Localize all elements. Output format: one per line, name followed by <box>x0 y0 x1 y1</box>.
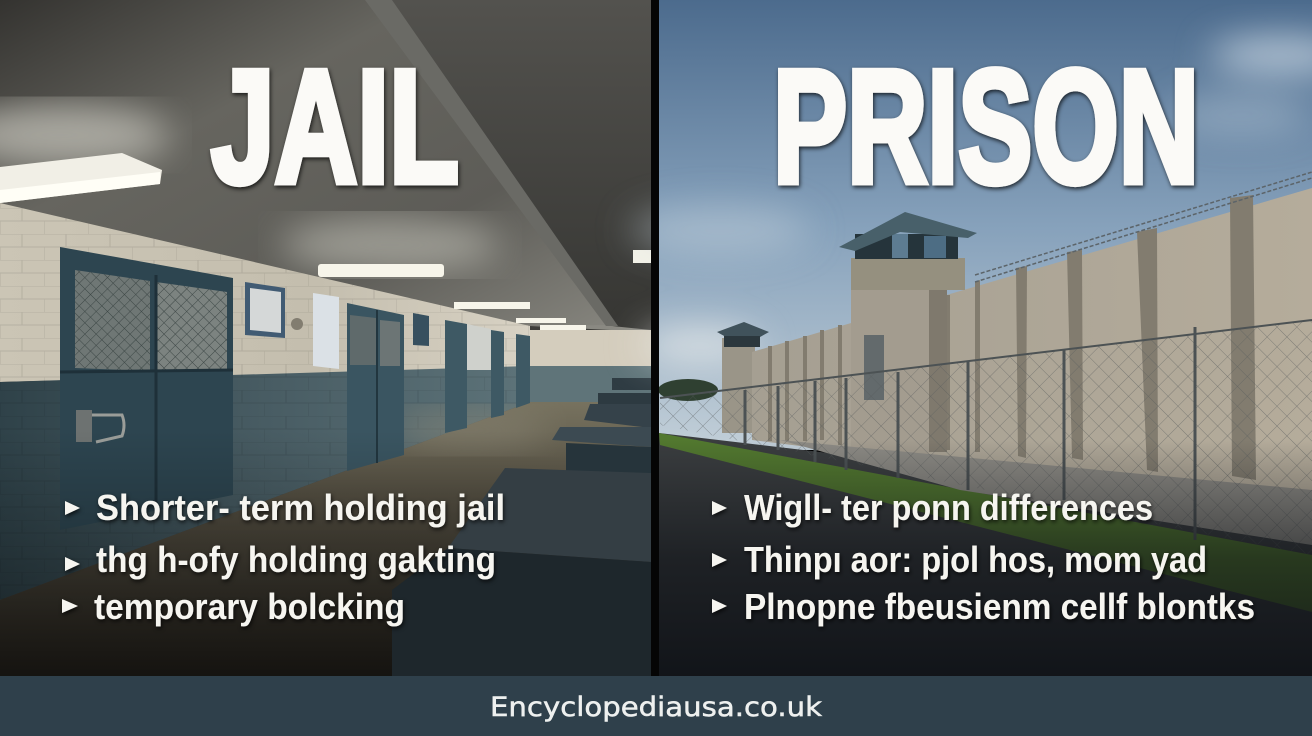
lower shading <box>659 440 1312 676</box>
jail ceiling <box>0 0 651 332</box>
perimeter wall <box>752 188 1312 510</box>
ground <box>659 433 1312 676</box>
cell door 1 <box>60 247 233 530</box>
tables <box>392 378 651 676</box>
footer bar <box>0 676 1312 736</box>
sky <box>659 0 1312 450</box>
jail upper wall <box>0 203 530 382</box>
ceiling lights <box>0 153 651 330</box>
razor wire on wall <box>975 172 1312 282</box>
distant trees <box>658 379 718 401</box>
prison bullet 1: Wigll- ter ponn differences <box>744 487 1153 528</box>
text block: prison bullets <box>712 487 1255 627</box>
panel: prison exterior photo illustration <box>630 0 1312 676</box>
panel: jail interior photo illustration <box>0 0 651 676</box>
wall notices <box>245 282 429 369</box>
title: JAIL: JAIL <box>211 37 459 217</box>
chain-link fence <box>660 320 1312 555</box>
divider <box>651 0 659 676</box>
text block: jail bullets <box>62 487 505 627</box>
main watchtower <box>839 212 977 454</box>
far cell doors <box>445 320 530 433</box>
prison bullet 3: Plnopne fbeusienm cellf blontks <box>744 586 1255 627</box>
footer website text: Encyclopediausa.co.uk <box>490 692 822 723</box>
prison bullet 2: Thinpı aor: pjol hos, mom yad <box>744 539 1207 580</box>
jail bullet 1: Shorter- term holding jail <box>96 487 505 528</box>
clouds <box>630 37 1312 363</box>
jail end wall <box>530 330 651 402</box>
cell door 2 <box>347 303 404 471</box>
lower shading <box>0 430 651 676</box>
jail floor <box>0 402 651 676</box>
jail lower wall <box>0 366 530 600</box>
jail bullet 3: temporary bolcking <box>94 586 405 627</box>
small watchtower <box>717 322 769 433</box>
jail bullet 2: thg h-ofy holding gakting <box>96 539 496 580</box>
